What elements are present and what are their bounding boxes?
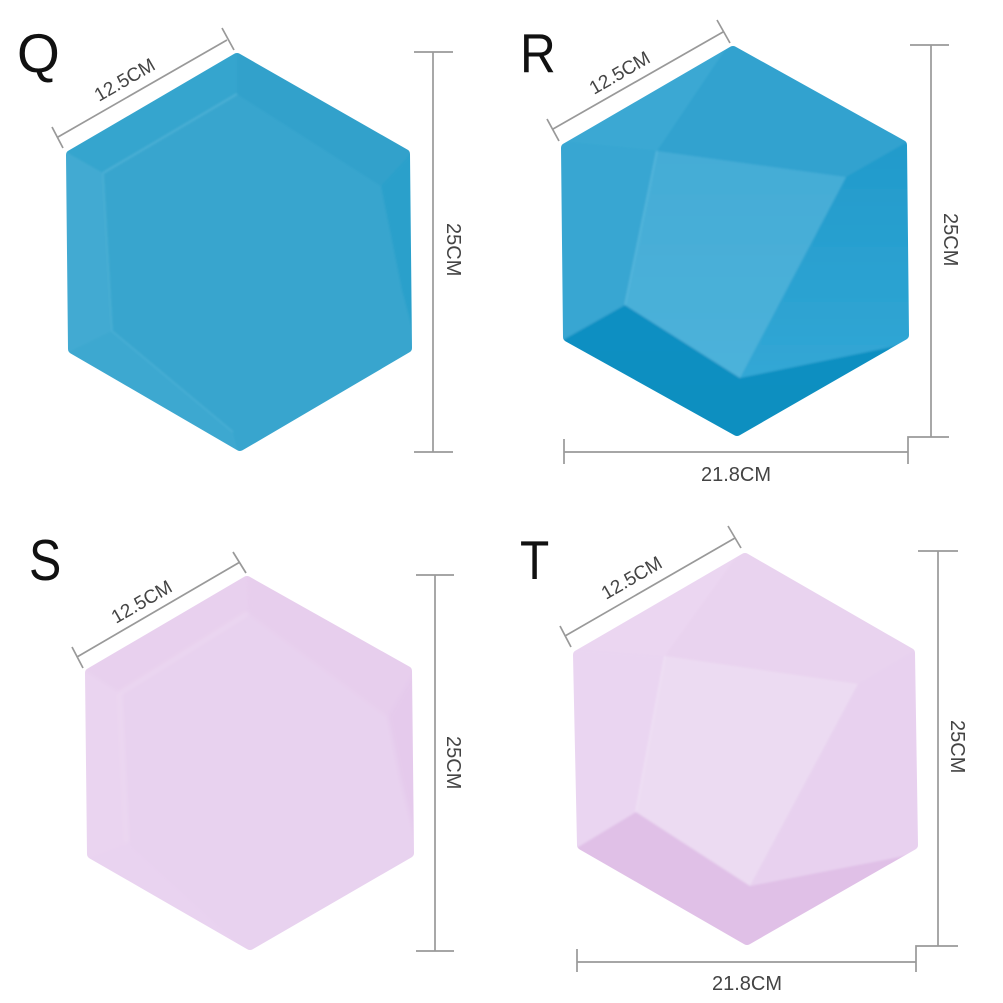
T width dimension — [560, 526, 741, 647]
R tile — [561, 46, 909, 436]
S width dimension: 12.5CM — [108, 577, 176, 628]
R base dimension: 21.8CM — [701, 464, 771, 486]
Q tile — [66, 53, 412, 451]
S width dimension — [72, 552, 246, 668]
R width dimension — [547, 20, 730, 141]
R height dimension — [908, 45, 961, 439]
Q height dimension: 25CM — [442, 223, 464, 276]
panel: hexagon R — [520, 20, 961, 486]
panel: hexagon S — [29, 529, 464, 965]
S height dimension: 25CM — [442, 736, 464, 789]
R width dimension: 12.5CM — [586, 48, 654, 99]
R base dimension — [564, 439, 908, 486]
letter T: T — [520, 529, 549, 591]
S height dimension — [416, 575, 464, 951]
Q height dimension — [414, 52, 464, 452]
panel: hexagon T — [520, 526, 968, 995]
T height dimension: 25CM — [946, 720, 968, 773]
letter R: R — [520, 24, 556, 85]
panel: hexagon Q — [17, 22, 464, 465]
S tile — [85, 576, 414, 950]
T height dimension — [916, 551, 968, 949]
T tile — [573, 553, 918, 945]
T width dimension: 12.5CM — [598, 553, 666, 604]
letter S: S — [29, 529, 61, 593]
T base dimension: 21.8CM — [712, 973, 782, 995]
letter Q: Q — [17, 22, 60, 84]
Q width dimension — [52, 28, 234, 148]
T base dimension — [577, 949, 916, 995]
R height dimension: 25CM — [939, 213, 961, 266]
Q width dimension: 12.5CM — [91, 55, 159, 106]
